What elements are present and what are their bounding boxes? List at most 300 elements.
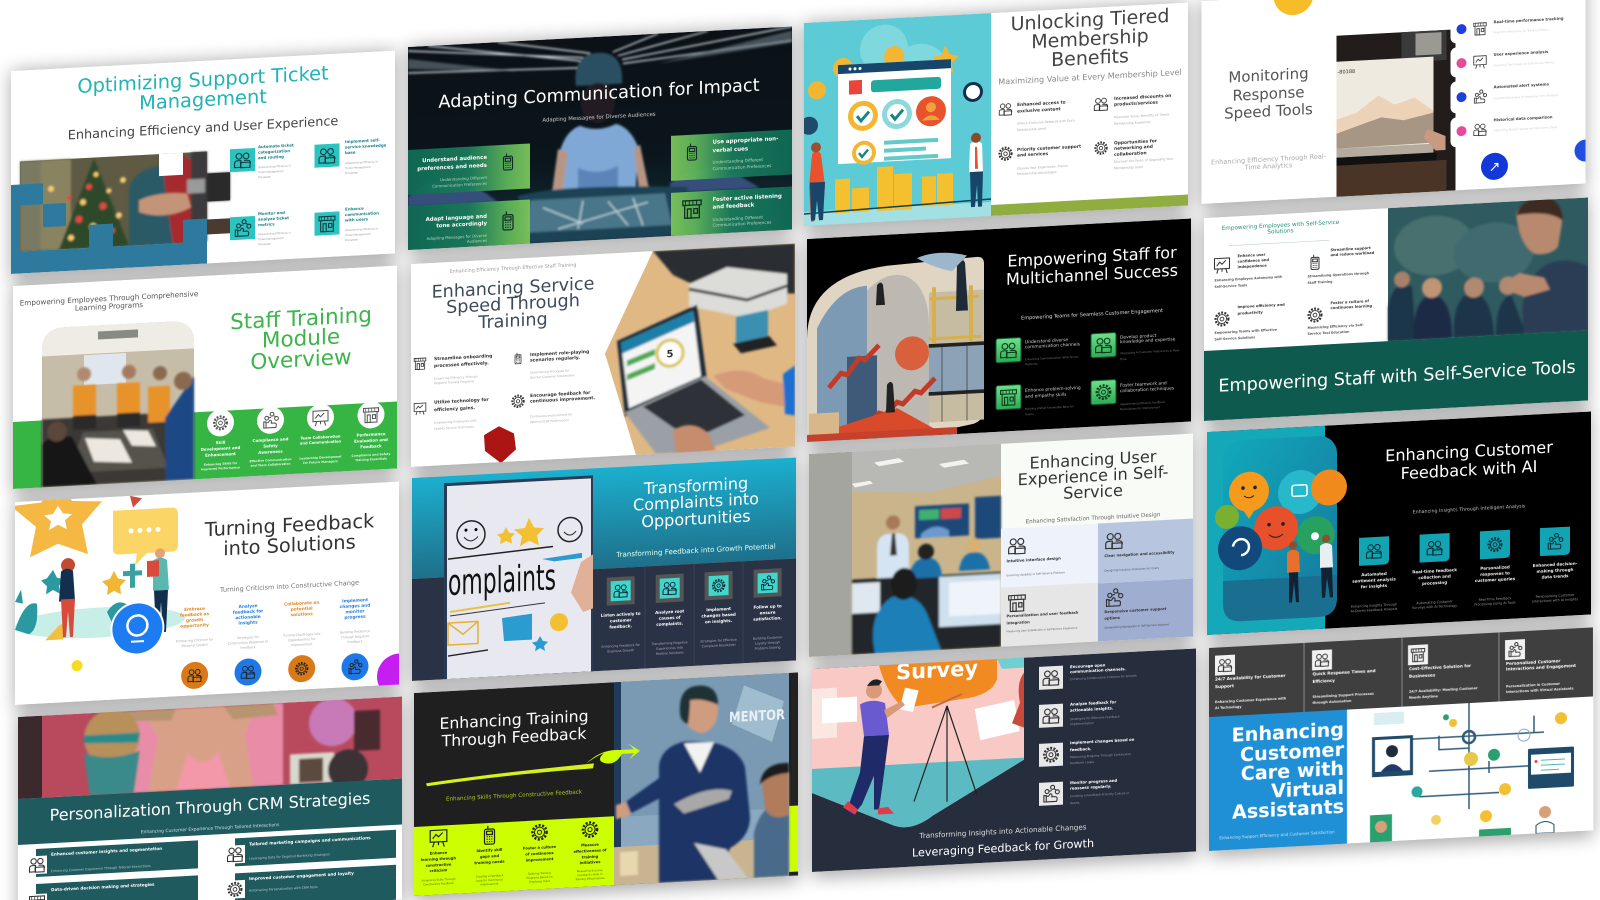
item: encourage open communication [1039, 661, 1137, 690]
slide: Unlocking Tiered Membership Benefits [800, 2, 1188, 226]
item: analyze feedback [1039, 699, 1120, 728]
column: collaborate: Improvement [291, 642, 313, 647]
subtitle: Empowering Teams for Seamless Customer Engagement [1021, 308, 1163, 322]
icon: blue globe badge [110, 600, 164, 657]
feature: automate ticket categorization: Processes [258, 176, 271, 179]
column: team collaboration: Leadership Development [299, 454, 342, 461]
column: sentiment analysis: AI-Driven Feedback Analysis [1351, 607, 1398, 613]
feature: monitor and analyze ticket metrics [230, 210, 291, 248]
feature: implement self-service knowledge base [314, 137, 387, 177]
slide: Adapting Communication for Impact [408, 26, 792, 250]
panel: metric cards: User experience analysis [1494, 49, 1549, 57]
item: tailored marketing [226, 830, 396, 867]
panel: metric cards: Historical data comparison [1494, 114, 1553, 122]
title: Customer [1240, 738, 1345, 766]
column: measure effectiveness: Measuring Success: [577, 868, 603, 873]
feature: role-playing: scenarios regularly. [530, 355, 580, 364]
feature: exclusive content [999, 99, 1075, 133]
item: encourage open communication: Enhancing Constructive Criticism for Growth [1070, 674, 1137, 681]
title: Leveraging Feedback for Growth [912, 837, 1094, 860]
panel: responsive support [1098, 578, 1193, 642]
feature: utilize technology: Utilize technology for [434, 397, 489, 406]
feature: product knowledge: Time [1119, 357, 1127, 361]
illustration: virtual assistant network [1370, 697, 1574, 842]
column: measure effectiveness: Feedback's Role in [578, 872, 603, 877]
column: sentiment analysis: Automated [1361, 571, 1387, 577]
column: analyze feedback: insights [238, 619, 258, 627]
column: foster culture: Employee Input [529, 879, 550, 884]
title: Unlocking Tiered [1011, 5, 1169, 35]
column: collaborate: Opportunities for [288, 637, 316, 642]
feature: problem-solving: and empathy skills [1025, 392, 1067, 400]
feature: utilize technology: efficiency gains. [434, 405, 475, 413]
item: customer insights: Enhancing Customer Experience Through Tailored Interactions [51, 864, 151, 873]
icon: arrow button [1481, 152, 1508, 181]
column: listen actively: Business Growth [607, 648, 634, 654]
column: skill development: Improved Performance [201, 465, 240, 471]
item: data-driven decisions: Data-driven decision making and strategies [51, 882, 155, 892]
feature: exclusive content: Enhanced access to [1017, 100, 1066, 108]
panel: personalization: Personalization and user feedback [1006, 611, 1079, 618]
item: implement changes: Feedback Loops [1070, 760, 1094, 765]
feature: streamline onboarding: Streamline onboarding [434, 353, 492, 362]
slide: Staff Training Module Overview [13, 265, 397, 489]
item: encourage open communication: communication channels. [1070, 666, 1126, 674]
panel: metric cards [1450, 17, 1581, 190]
column: follow up: Building Customer [753, 635, 783, 641]
item: customer engagement: Automating Personalization with CRM Tools [249, 885, 318, 893]
feature: enhance communication with users: Streamlining Efficiency in [345, 227, 378, 232]
photo: laptop analytics [1336, 29, 1456, 197]
subtitle: Solutions [1267, 227, 1294, 236]
column: team collaboration: Team Collaboration [300, 434, 341, 441]
panel: top benefit strip: Quick Response Times and [1312, 668, 1376, 676]
column: embrace feedback: growth [186, 617, 203, 624]
title: Complaints into [633, 489, 759, 515]
panel: metric cards: Automated alert systems [1494, 81, 1550, 89]
column: analyze feedback: Feedback [240, 645, 256, 650]
title: Speed Tools [1224, 100, 1313, 123]
column: real-time feedback: collection and [1418, 573, 1451, 580]
feature: encourage feedback: continuous improvement. [530, 395, 595, 405]
feature: exclusive content: exclusive content [1017, 106, 1061, 115]
slide: Enhancing Customer Care with Virtual Assistants [1209, 627, 1593, 851]
feature: discounts: Membership Explained [1114, 120, 1150, 126]
column: skill development: Development and [201, 445, 241, 452]
item: analyze feedback: actionable insights. [1070, 705, 1114, 713]
slide: Enhancing Customer Feedback with AI [1207, 411, 1591, 635]
panel: understand audience [408, 143, 530, 195]
feature: priority support [999, 144, 1081, 177]
slide: Empowering Staff for Multichannel Success [807, 218, 1191, 442]
feature: enhance communication with users: Ticket Management [345, 233, 371, 237]
panel: top benefit strip: Enhancing Customer Experience with [1215, 696, 1287, 704]
item: analyze feedback: Analyze feedback for [1070, 699, 1116, 707]
column: enhance learning: learning through [421, 856, 456, 862]
feature: teamwork: Foster teamwork and [1120, 380, 1167, 389]
panel: non-verbal cues: Use appropriate non- [712, 135, 778, 146]
panel: responsive support: Streamlining Navigation in Self-Service Systems [1104, 622, 1170, 630]
column: collaborate: Collaborate on [284, 600, 319, 608]
panel: top benefit strip: Interactions with Virtual Assistants [1506, 686, 1574, 694]
title: Speed Through [446, 291, 580, 318]
panel: top benefit strip: AI Technology [1215, 705, 1242, 710]
column: enhanced decision-making: Personalizing Customer [1536, 593, 1575, 599]
column: real-time feedback: Surveys with AI Technology [1412, 604, 1457, 610]
feature: enhance communication with users: with users [345, 216, 369, 223]
feature: networking: networking and [1114, 144, 1153, 152]
subtitle: Maximizing Value at Every Membership Level [998, 67, 1182, 87]
title: Management [139, 85, 267, 115]
column: personalized responses: Personalized [1480, 564, 1510, 571]
subtitle: Transforming Feedback into Growth Potential [615, 542, 776, 559]
column: performance evaluation: Evaluation and [354, 437, 388, 444]
feature: enhance communication with users [314, 207, 379, 242]
feature: role-playing: Quicker Customer Interactions [530, 373, 575, 380]
feature: continuous learning: Service Tool Education [1308, 330, 1350, 336]
feature: product knowledge: knowledge and expertise [1120, 336, 1176, 345]
feature: role-playing [515, 349, 589, 380]
title: Service [1063, 481, 1123, 503]
panel: understand audience: Understand audience [422, 154, 487, 164]
feature: communication channels [996, 334, 1081, 368]
feature: exclusive content: Unlock Exclusive Rewards with Each [1017, 119, 1075, 126]
feature: enhance communication with users: Enhance [345, 206, 364, 212]
panel: non-verbal cues: Communication Preferences [712, 163, 771, 171]
feature: streamline onboarding: processes effectively. [434, 360, 489, 369]
item: data-driven decisions [28, 875, 198, 900]
title: Personalization Through CRM Strategies [50, 789, 370, 825]
title: Turning Feedback [204, 509, 375, 541]
photo: executive pointing [1388, 195, 1588, 341]
feature: monitor and analyze ticket metrics: analyze ticket [258, 215, 289, 222]
slide: Leveraging Feedback for Growth [812, 644, 1196, 872]
icon: lime arrow [586, 743, 640, 765]
column: enhanced decision-making: Interactions with AI Insights [1532, 597, 1578, 604]
panel: green title band [1204, 330, 1588, 421]
column: compliance [249, 406, 292, 468]
column: real-time feedback: Automating Customer [1416, 599, 1453, 605]
feature: streamline support: Staff Training [1308, 280, 1333, 285]
column: identify skill gaps: Loop for Continuous [476, 877, 504, 883]
column: personalized responses: responses to [1480, 570, 1510, 577]
icon: arrow button: ↗ [1489, 159, 1500, 176]
feature: streamline support [1308, 246, 1375, 285]
panel: active listening: Understanding Different [712, 214, 763, 222]
feature: confidence: Enhancing Employee Autonomy with [1214, 275, 1283, 282]
column: listen actively [601, 576, 641, 654]
feature: efficiency: Empowering Teams with Effective [1214, 328, 1278, 335]
title: Care with [1241, 757, 1344, 785]
item: monitor progress: Monitor progress and [1070, 778, 1118, 785]
column: measure effectiveness [573, 822, 607, 881]
panel: title band [18, 778, 402, 845]
title: Experience in Self- [1018, 462, 1169, 489]
column: personalized responses: customer queries [1475, 576, 1516, 583]
feature: encourage feedback: Continuous Improvement for [530, 412, 573, 419]
column: implement changes [700, 571, 737, 649]
column: follow up: Problem-Solving [755, 645, 781, 651]
illustration: scaffold and staircases [807, 251, 984, 442]
panel: active listening: and feedback [712, 201, 755, 211]
column: enhance learning: criticism [430, 868, 448, 873]
feature: discounts: products/services [1114, 100, 1158, 108]
title: Training [477, 310, 548, 333]
column: foster culture: Foster a culture [523, 845, 557, 851]
column: enhance learning: constructive [426, 862, 452, 868]
column: follow up: Follow up to [753, 603, 782, 610]
column: team collaboration: for Future Managers [303, 459, 338, 465]
panel: clear navigation: Designing Intuitive Interfaces for Users [1104, 566, 1160, 573]
title: Empowering Staff for [1007, 243, 1177, 271]
column: performance evaluation: Compliance and Safety [352, 452, 390, 458]
title: Staff Training [230, 303, 372, 335]
photo: laptop speed test [605, 243, 795, 457]
feature: monitor and analyze ticket metrics: metrics [258, 221, 275, 227]
column: analyze feedback [228, 602, 268, 687]
feature: efficiency [1214, 303, 1285, 341]
column: analyze root causes: Analyze root [655, 608, 684, 615]
feature: priority support: Membership Advantages [1017, 170, 1057, 176]
feature: utilize technology: Empowering Employees with [434, 418, 477, 425]
panel: understand audience: Communication Preferences [432, 181, 487, 189]
title: Enhancing [1232, 718, 1344, 747]
panel: non-verbal cues: verbal cues [712, 145, 749, 154]
feature: implement self-service knowledge base: Ticket Management [345, 166, 371, 170]
item: customer engagement [226, 865, 396, 900]
photo: complaints notepad [444, 475, 593, 679]
column: identify skill gaps: Improvement [480, 881, 499, 886]
feature: monitor and analyze ticket metrics: Monitor and [258, 210, 285, 216]
column: embrace feedback [176, 605, 214, 690]
column: implement changes: Through Negative [340, 634, 369, 640]
subtitle: Learning Programs [75, 300, 143, 313]
feature: discounts [1094, 93, 1171, 127]
column: analyze root causes: complaints. [656, 620, 684, 627]
photo: training room [42, 320, 194, 487]
column: analyze feedback: Strategies for [237, 635, 260, 640]
item: implement changes: Implement changes based on [1070, 737, 1135, 745]
feature: utilize technology: Speedy Service Techniques [434, 425, 474, 431]
feature: enhance communication with users: Processes [345, 238, 358, 242]
feature: networking: collaboration [1114, 150, 1147, 158]
title: Overview [250, 345, 352, 375]
panel: intuitive interface: Intuitive interface design [1006, 556, 1061, 563]
feature: streamline onboarding: Enhancing Efficiency Through [434, 374, 478, 381]
column: compliance: Compliance and [253, 436, 289, 443]
feature: encourage feedback: Encourage feedback for [530, 390, 591, 399]
title: Monitoring [1228, 64, 1309, 87]
slide: Enhancing Training Through Feedback [414, 672, 798, 896]
column: compliance: Effective Communication [249, 457, 292, 463]
title: Enhancing Customer [1385, 437, 1553, 465]
column: skill development: Enhancing Skills for [204, 461, 238, 467]
item: tailored marketing: Tailored marketing campaigns and communications [249, 835, 371, 847]
item: monitor progress [1039, 777, 1129, 807]
column: performance evaluation [352, 400, 390, 462]
column: sentiment analysis: Enhancing Insights Through [1351, 602, 1397, 609]
column: embrace feedback: Personal Growth [182, 643, 208, 648]
column: enhance learning: Enhance [430, 851, 448, 856]
panel: personalization [1001, 583, 1098, 647]
feature: confidence: independence [1238, 264, 1267, 269]
subtitle: Empowering Employees with Self-Service [1222, 219, 1340, 232]
subtitle: Enhancing Efficiency Through Effective Staff Training [450, 262, 576, 275]
feature: streamline support: and reduce workload [1330, 251, 1375, 257]
title: Virtual [1271, 776, 1344, 803]
column: analyze feedback: actionable [235, 614, 261, 621]
title: Feedback with AI [1401, 457, 1537, 483]
feature: communication channels: Understand diverse [1025, 337, 1068, 345]
panel: adapt language [408, 199, 530, 250]
column: enhanced decision-making: Enhanced decision- [1533, 561, 1578, 568]
column: foster culture: of continuous [525, 851, 554, 857]
feature: confidence: confidence and [1238, 258, 1269, 264]
column: listen actively: Enhancing Feedback for [602, 643, 641, 649]
column: implement changes: Complaint Resolution [702, 643, 736, 649]
item: analyze feedback: Strategies for Effective Feedback [1070, 715, 1120, 721]
panel: intuitive interface [1001, 524, 1098, 588]
column: measure effectiveness: training [582, 855, 599, 860]
column: follow up: Loyalty through [755, 640, 780, 646]
column: measure effectiveness: effectiveness of [573, 848, 607, 854]
column: personalized responses: Real-Time Feedback [1479, 596, 1511, 602]
feature: communication channels: Platforms [1025, 362, 1038, 366]
panel: adapt language: Adapting Messages for Diverse [427, 233, 488, 241]
feature: implement self-service knowledge base: base [345, 150, 356, 155]
feature: automate ticket categorization: Ticket Management [258, 170, 284, 174]
title: Optimizing Support Ticket [77, 61, 329, 98]
column: team collaboration: and Communication [300, 439, 342, 446]
column: foster culture: Tailoring Training [527, 871, 551, 876]
photo: christmas tree and worker [20, 150, 230, 252]
feature: teamwork [1091, 376, 1175, 413]
feature: networking: Opportunities for [1114, 138, 1158, 146]
feature: efficiency: Improve efficiency and [1238, 303, 1285, 309]
feature: networking: Membership Level [1114, 165, 1143, 170]
subtitle: Adapting Messages for Diverse Audiences [542, 111, 656, 124]
slide: Personalization Through CRM Strategies [18, 693, 402, 900]
column: implement changes: monitor [345, 608, 365, 615]
feature: monitor and analyze ticket metrics: Streamlining Efficiency in [258, 232, 291, 236]
item: implement changes: Measuring Progress Through Continuous [1070, 752, 1131, 759]
feature: implement self-service knowledge base: Implement self- [345, 137, 380, 144]
column: listen actively: feedback. [609, 623, 632, 629]
illustration: feedback people [11, 473, 185, 642]
column: real-time feedback: processing [1422, 580, 1447, 586]
feature: problem-solving: Teams [1024, 412, 1034, 416]
title: Empowering Staff with Self-Service Tools [1218, 358, 1576, 397]
slide: Transforming Complaints into Opportunities [412, 457, 796, 681]
column: skill development: Enhancement [205, 451, 236, 458]
column: performance evaluation: Performance [357, 431, 386, 438]
panel: active listening: Communication Preferences [712, 220, 771, 228]
feature: teamwork: Implementing Effective Feedback [1120, 400, 1165, 406]
feature: automate ticket categorization: and routing [258, 154, 284, 160]
column: real-time feedback [1412, 533, 1457, 610]
column: personalized responses: Processing Using AI Tools [1474, 600, 1516, 607]
column: identify skill gaps: gaps and [480, 854, 499, 859]
illustration: survey easel: Survey [896, 656, 978, 685]
panel: active listening: Foster active listening [712, 192, 782, 203]
slide: Empowering Staff with Self-Service Tools [1204, 195, 1588, 421]
title: Benefits [1051, 45, 1129, 71]
column: identify skill gaps: Creating a Feedback [476, 873, 504, 879]
item: monitor progress: reassess regularly. [1070, 783, 1112, 791]
subtitle: Enhancing Skills Through Constructive Feedback [446, 788, 583, 803]
feature: teamwork: Mechanisms for Improvement [1120, 405, 1160, 411]
feature: monitor and analyze ticket metrics: Ticket Management [258, 237, 284, 241]
column: listen actively: Listen actively to [601, 611, 641, 618]
column: implement changes: Building Resilience [340, 629, 370, 635]
column: enhanced decision-making: data trends [1542, 573, 1569, 580]
feature: confidence [1214, 252, 1283, 289]
feature: product knowledge [1091, 329, 1180, 363]
panel: clear navigation: Clear navigation and accessibility [1104, 550, 1175, 558]
slide: Optimizing Support Ticket Management [11, 50, 395, 274]
panel: active listening [671, 186, 792, 236]
column: implement changes: Implement [706, 606, 731, 612]
panel: top benefit strip: 24/7 Availability: Meeting Customer [1409, 686, 1478, 694]
column: performance evaluation: Training Essentials [355, 456, 387, 462]
icon: brush stroke [426, 763, 594, 786]
column: implement changes: changes and [340, 602, 370, 610]
column: analyze root causes [651, 573, 688, 656]
panel: top benefit strip: Efficiency [1312, 678, 1335, 684]
column: follow up [753, 568, 783, 651]
column: follow up: satisfaction. [753, 615, 782, 622]
column: embrace feedback: Embrace [184, 606, 205, 613]
subtitle: Enhancing Support Efficiency and Customer Satisfaction [1219, 829, 1335, 840]
item: analyze feedback: Implementation [1070, 721, 1094, 726]
feature: role-playing: Implement role-playing [530, 349, 589, 358]
feature: utilize technology [414, 397, 489, 432]
item: monitor progress: Creating a Feedback-Friendly Culture in [1070, 791, 1129, 798]
column: enhance learning: Enhancing Skills Through [422, 877, 456, 883]
panel: personalization: integration [1006, 620, 1030, 625]
column: foster culture: Programs Based on [526, 875, 553, 880]
panel: blue title block [1209, 710, 1347, 851]
title: Transforming [643, 474, 748, 498]
feature: networking: Discover the Perks of Upgrading Your [1114, 157, 1174, 164]
slide: Monitoring Response Speed Tools [1202, 0, 1596, 204]
feature: discounts: Maximize Value: Benefits of Tiered [1114, 112, 1169, 119]
subtitle: Transforming Insights into Actionable Changes [918, 822, 1087, 840]
item: monitor progress: Teams [1069, 801, 1080, 805]
item: implement changes: feedback. [1070, 746, 1092, 752]
feature: encourage feedback [512, 390, 595, 425]
column: analyze root causes: Positive Solutions [656, 650, 684, 656]
panel: top benefit strip: Businesses [1409, 672, 1436, 679]
panel: top benefit strip: Interactions and Engagement [1506, 663, 1576, 672]
column: follow up: ensure [760, 610, 776, 615]
subtitle: Enhancing Customer Experience Through Tailored Interactions [141, 822, 280, 835]
feature: priority support: and services [1017, 151, 1048, 159]
icon: red hexagon [484, 425, 516, 464]
column: implement changes: Strategies for Effective [700, 638, 737, 644]
column: implement changes: Feedback [347, 639, 363, 644]
illustration: survey easel [812, 654, 1024, 832]
title: Enhancing User [1030, 447, 1157, 473]
photo: laptop analytics: -80188 [1338, 69, 1355, 76]
title: into Solutions [223, 530, 356, 560]
title: Membership [1031, 25, 1149, 53]
column: embrace feedback: Embracing Criticism for [176, 637, 214, 643]
panel: metric cards: Assessing Tool Impact on Self-Service Metrics [1494, 60, 1555, 67]
feature: continuous learning [1308, 299, 1372, 336]
column: skill development [201, 408, 241, 471]
panel: lime band [414, 816, 614, 896]
